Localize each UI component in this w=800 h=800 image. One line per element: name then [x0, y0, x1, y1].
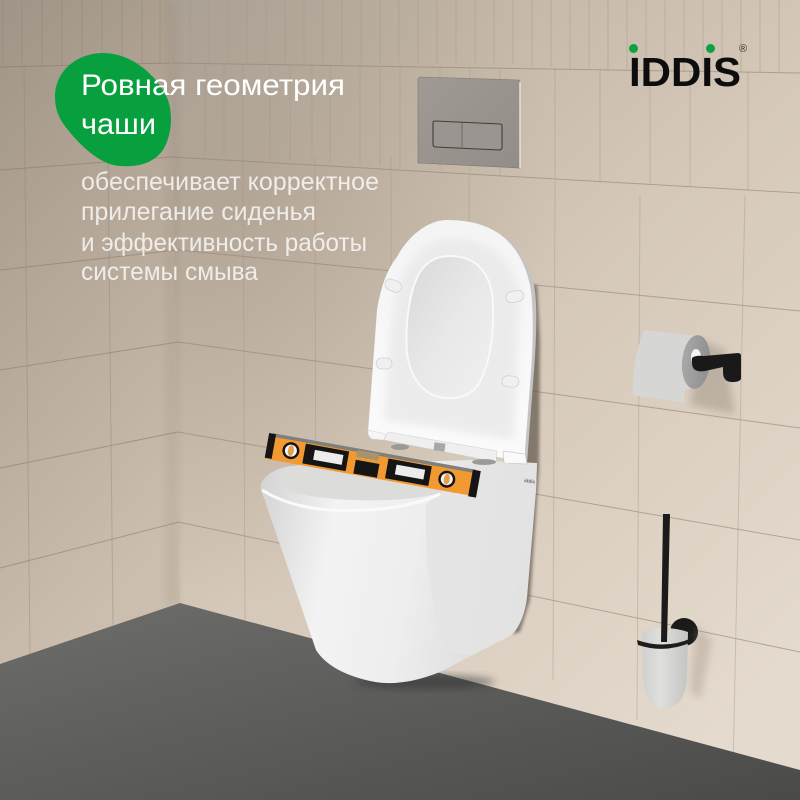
description text: системы смыва: [81, 258, 258, 286]
rubber bumpers: [376, 277, 525, 388]
registered mark: ®: [739, 43, 747, 55]
brush handle: [661, 514, 670, 642]
toilet brush: [637, 514, 712, 709]
heading: чаши: [81, 108, 156, 141]
bowl basin: [280, 464, 442, 500]
level body: [265, 434, 480, 497]
left window: [302, 444, 349, 471]
right tiled wall: [170, 0, 800, 800]
brand logo: IDDIS: [629, 49, 741, 95]
spirit level: [264, 433, 481, 498]
description text: обеспечивает корректное: [81, 168, 379, 196]
green blob: [55, 53, 171, 166]
right vial: [437, 469, 457, 489]
heading: Ровная геометрия: [81, 69, 345, 102]
wall mount: [670, 618, 698, 646]
seat hinge: [368, 430, 527, 465]
left vial: [281, 441, 301, 461]
bowl rim: [262, 490, 440, 511]
logo green dots: [629, 44, 715, 53]
left tiled wall: [0, 0, 180, 664]
centre vial: [353, 450, 381, 478]
paper shadow: [690, 340, 735, 415]
holder arm: [692, 353, 741, 382]
paper roll: [633, 330, 712, 403]
wall mount shadow: [690, 625, 712, 700]
flush buttons: [433, 121, 502, 150]
seat edge: [447, 220, 536, 463]
glass cup: [642, 628, 688, 709]
flush plate: [418, 77, 520, 168]
raised toilet seat: [368, 220, 536, 465]
black ring: [637, 638, 692, 649]
seat shading ring: [384, 238, 520, 440]
description text: и эффективность работы: [81, 229, 367, 257]
seat opening: [407, 256, 493, 398]
right window: [385, 459, 432, 486]
back plate and body: [261, 460, 537, 683]
logo mark on ceramic: iddis: [524, 478, 536, 486]
toilet shadow on floor and wall: [355, 285, 540, 689]
right body seam: [426, 462, 537, 655]
description text: прилегание сиденья: [81, 198, 316, 226]
level top strip: [273, 433, 476, 473]
toilet paper holder: [633, 330, 741, 415]
seat body: [368, 220, 533, 464]
toilet bowl: [261, 460, 537, 683]
floor: [0, 603, 800, 800]
level end caps: [264, 433, 481, 498]
